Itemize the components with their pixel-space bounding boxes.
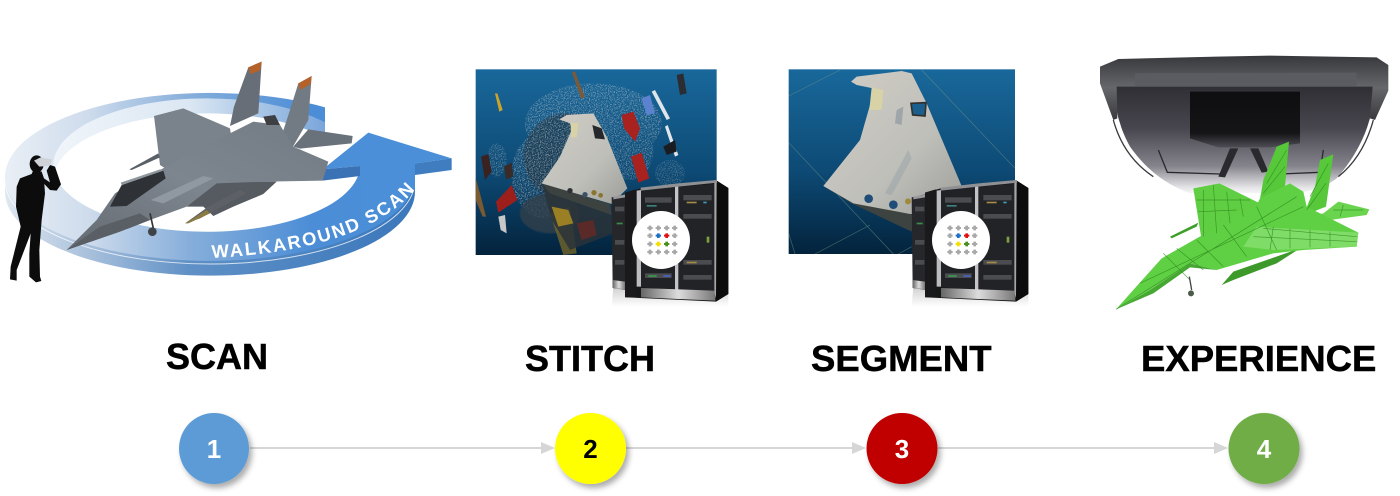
jet: grey F-15 [67,62,353,250]
panel: stitch photo with point cloud [476,69,717,255]
step badge 3 [866,413,938,484]
step badge 3: 3 [895,434,909,464]
heading: segment: SEGMENT [811,338,992,379]
heading: scan: SCAN [166,336,268,377]
arrow: step 3 to 4 [938,442,1228,454]
arrow: step 2 to 3 [626,442,866,454]
step badge 4: 4 [1257,434,1272,464]
label: walkaround scan: WALKAROUND SCAN [211,182,414,258]
headset [1100,56,1388,193]
step badge 4 [1228,413,1300,484]
heading: experience: EXPERIENCE [1141,338,1376,379]
icon: server rack with grid logo (segment) [912,180,1028,307]
step badge 2 [555,413,626,484]
step badge 1: 1 [207,434,221,464]
icon: server rack with grid logo (stitch) [612,180,728,307]
panel: segment photo of isolated tail [789,69,1015,254]
panel: experience headset and green jet [1100,56,1388,309]
step badge 2: 2 [583,434,598,464]
panel: scan illustration [5,62,452,282]
arrow: step 1 to 2 [250,442,555,454]
background with grid lines [789,69,1015,254]
point cloud scene [476,69,717,255]
scanned tail fin [542,113,627,215]
step badge 1 [179,413,249,484]
silhouette: person wearing headset [10,155,61,282]
jet: green wireframe F-15 [1116,142,1369,309]
segmented tail fin [823,71,964,232]
walkaround arrow ring [5,93,452,276]
heading: stitch: STITCH [525,338,655,379]
